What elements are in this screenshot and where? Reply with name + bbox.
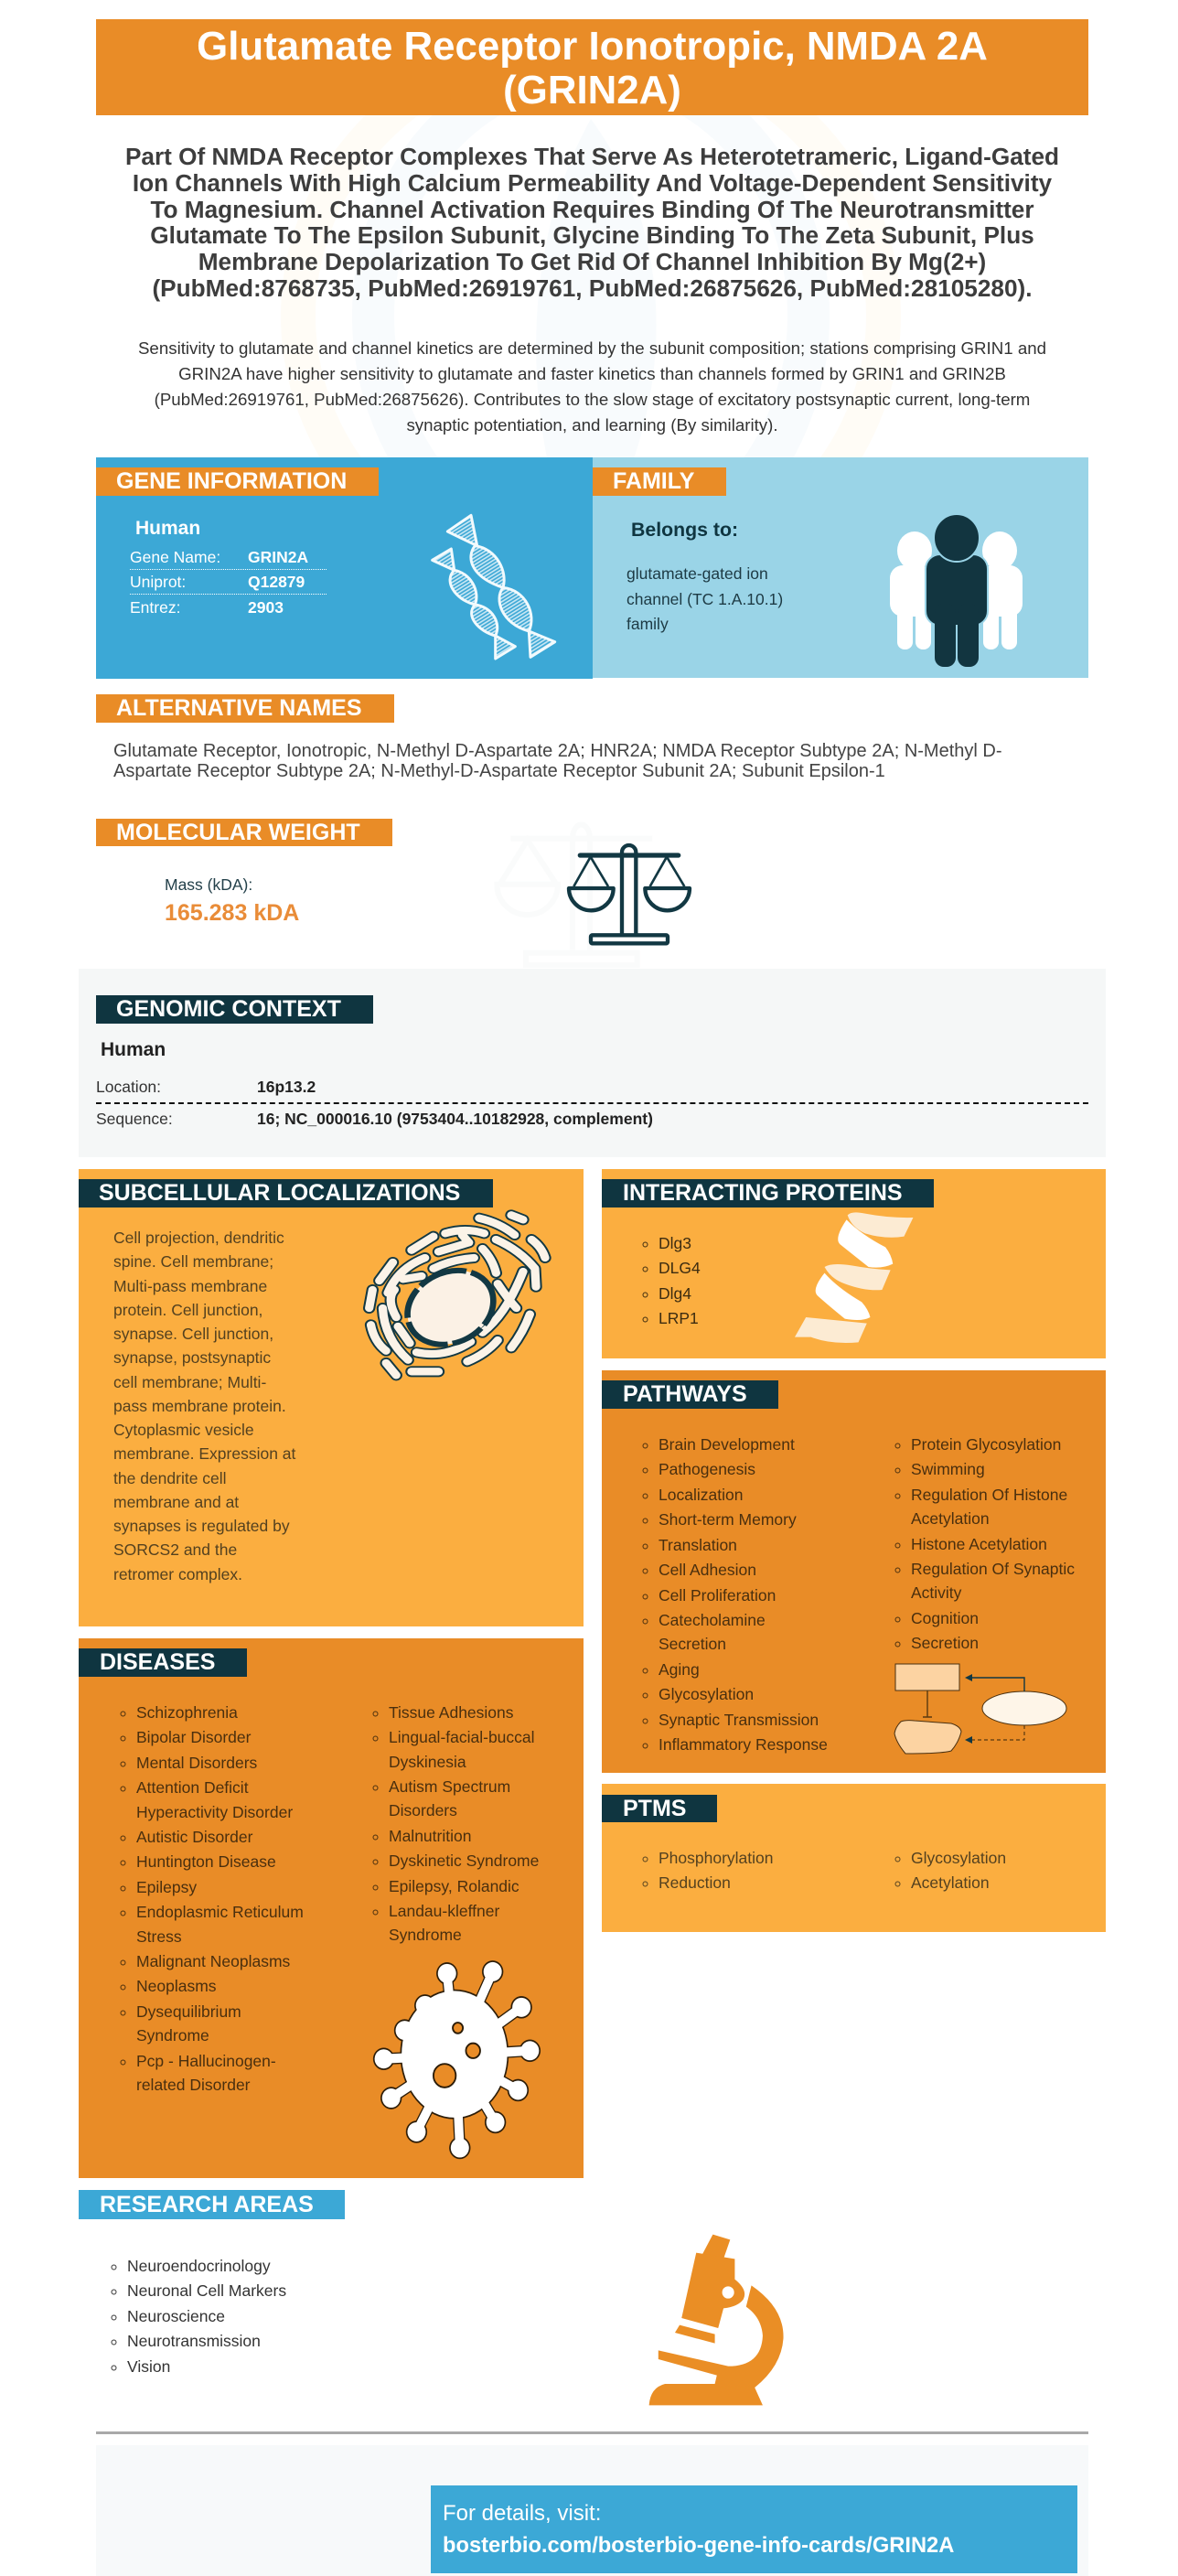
background watermark logo bbox=[281, 115, 901, 457]
diseases list column 1: Epilepsy bbox=[136, 1878, 197, 1896]
localization text: Cell projection, dendritic bbox=[113, 1229, 284, 1247]
belongs to label: Belongs to: bbox=[631, 519, 738, 541]
pathways list column 2: Protein Glycosylation bbox=[911, 1435, 1061, 1454]
localization text: synapse, postsynaptic bbox=[113, 1348, 271, 1367]
localization text: pass membrane protein. bbox=[113, 1397, 286, 1415]
gene name row: Gene Name: bbox=[130, 548, 220, 566]
uniprot row: Uniprot: bbox=[130, 573, 186, 591]
divider line bbox=[96, 2431, 1088, 2434]
location row bbox=[96, 1078, 316, 1096]
diseases list column 2: Malnutrition bbox=[389, 1827, 471, 1845]
pathways list column 2: Secretion bbox=[911, 1634, 979, 1652]
pathways list column 2 bbox=[894, 1435, 1075, 1652]
alternative names text: Glutamate Receptor, Ionotropic, N-Methyl D-Aspartate 2A; HNR2A; NMDA Receptor Subtype 2A; N-Methyl D- bbox=[113, 741, 1001, 761]
title banner: Glutamate Receptor Ionotropic, NMDA 2A bbox=[197, 24, 988, 69]
heading: family bbox=[593, 467, 726, 496]
diseases list column 2 bbox=[373, 1703, 539, 1944]
icon: balance scale with ghost bbox=[567, 843, 691, 946]
panel: genomic context: 16p13.2 bbox=[257, 1078, 316, 1096]
localization text bbox=[113, 1229, 296, 1583]
protein list: LRP1 bbox=[659, 1309, 699, 1327]
panel: genomic context: 16; NC_000016.10 (9753404..10182928, complement) bbox=[257, 1110, 653, 1128]
heading: alternative names: ALTERNATIVE NAMES bbox=[116, 695, 362, 721]
localization text: synapses is regulated by bbox=[113, 1517, 290, 1535]
diseases list column 1: Attention Deficit bbox=[136, 1778, 249, 1797]
heading: diseases: DISEASES bbox=[100, 1649, 215, 1675]
PTMs list column 1: Reduction bbox=[659, 1873, 731, 1892]
protein list bbox=[642, 1234, 701, 1327]
icon: pathway diagram bbox=[894, 1663, 1066, 1755]
panel: gene information bbox=[96, 457, 593, 679]
pathways list column 1: Cell Proliferation bbox=[659, 1586, 776, 1605]
PTMs list column 2 bbox=[894, 1849, 1006, 1892]
panel: genomic context bbox=[79, 969, 1106, 1157]
pathways list column 1: Synaptic Transmission bbox=[659, 1711, 819, 1729]
heading: genomic context: GENOMIC CONTEXT bbox=[116, 996, 341, 1022]
sequence row: Sequence: bbox=[96, 1110, 173, 1128]
heading: diseases bbox=[79, 1648, 247, 1677]
heading: interacting proteins: INTERACTING PROTEINS bbox=[623, 1180, 903, 1206]
PTMs list column 1: Phosphorylation bbox=[659, 1849, 774, 1867]
family description: channel (TC 1.A.10.1) bbox=[626, 589, 783, 607]
diseases list column 2: Landau-kleffner bbox=[389, 1902, 499, 1920]
pathways list column 2: Swimming bbox=[911, 1460, 985, 1478]
pathways list column 1: Aging bbox=[659, 1660, 700, 1679]
diseases list column 1: Endoplasmic Reticulum bbox=[136, 1903, 304, 1921]
diseases list column 1: Bipolar Disorder bbox=[136, 1728, 251, 1746]
research areas list: Vision bbox=[127, 2357, 170, 2376]
localization text: SORCS2 and the bbox=[113, 1540, 237, 1559]
sequence row bbox=[96, 1110, 653, 1128]
icon: microscope bbox=[649, 2234, 784, 2406]
panel: diseases bbox=[79, 1638, 584, 2178]
diseases list column 2: Dyskinetic Syndrome bbox=[389, 1852, 539, 1870]
callout: details link bbox=[431, 2485, 1077, 2573]
localization text: cell membrane; Multi- bbox=[113, 1372, 266, 1390]
heading: pathways bbox=[602, 1380, 778, 1409]
research areas list bbox=[112, 2257, 286, 2376]
family description bbox=[626, 564, 783, 633]
pathways list column 2: Acetylation bbox=[911, 1509, 990, 1528]
pathways list column 1: Brain Development bbox=[659, 1435, 795, 1454]
diseases list column 1: Mental Disorders bbox=[136, 1754, 257, 1772]
panel: footer bbox=[96, 2445, 1088, 2576]
dashed divider bbox=[96, 1102, 1088, 1104]
gene name row bbox=[130, 548, 327, 570]
mass value: 165.283 kDA bbox=[165, 900, 299, 926]
icon: protein ribbon bbox=[795, 1212, 913, 1343]
pathways list column 1: Cell Adhesion bbox=[659, 1561, 756, 1579]
localization text: the dendrite cell bbox=[113, 1469, 227, 1487]
diseases list column 1: Schizophrenia bbox=[136, 1703, 238, 1722]
pathways list column 2: Cognition bbox=[911, 1609, 979, 1627]
species label: Human bbox=[135, 518, 200, 539]
pathways list column 1: Pathogenesis bbox=[659, 1460, 755, 1478]
heading: research areas: RESEARCH AREAS bbox=[100, 2192, 314, 2217]
heading: subcellular localizations: SUBCELLULAR LOCALIZATIONS bbox=[99, 1180, 460, 1206]
PTMs list column 1 bbox=[642, 1849, 774, 1892]
subtitle: function summary: Ion Channels With High Calcium Permeability And Voltage-Dependent Sensitivity bbox=[133, 169, 1052, 197]
localization text: Multi-pass membrane bbox=[113, 1277, 267, 1295]
diseases list column 1: Autistic Disorder bbox=[136, 1828, 252, 1846]
entrez row bbox=[130, 598, 284, 617]
pathways list column 2: Histone Acetylation bbox=[911, 1535, 1047, 1553]
subtitle: function summary: (PubMed:8768735, PubMed:26919761, PubMed:26875626, PubMed:28105280). bbox=[152, 274, 1033, 302]
description paragraph: (PubMed:26919761, PubMed:26875626). Contributes to the slow stage of excitatory postsynaptic current, long-term bbox=[155, 390, 1030, 409]
subtitle: function summary bbox=[125, 143, 1059, 302]
pathways list column 1: Secretion bbox=[659, 1635, 726, 1653]
panel: subcellular localizations bbox=[79, 1169, 584, 1626]
localization text: membrane. Expression at bbox=[113, 1444, 295, 1463]
research areas list: Neuronal Cell Markers bbox=[127, 2281, 286, 2300]
diseases list column 1 bbox=[121, 1703, 304, 2094]
alternative names text bbox=[113, 741, 1001, 781]
diseases list column 1: Dysequilibrium bbox=[136, 2002, 241, 2021]
diseases list column 2: Disorders bbox=[389, 1801, 457, 1819]
diseases list column 1: Malignant Neoplasms bbox=[136, 1952, 290, 1970]
subtitle: function summary: Glutamate To The Epsilon Subunit, Glycine Binding To The Zeta Subunit, Plus bbox=[150, 221, 1034, 249]
entrez row: 2903 bbox=[248, 598, 284, 617]
gene name row: GRIN2A bbox=[248, 548, 308, 566]
diseases list column 1: Syndrome bbox=[136, 2026, 209, 2045]
pathways list column 1 bbox=[642, 1435, 828, 1754]
entrez row: Entrez: bbox=[130, 598, 180, 617]
diseases list column 2: Autism Spectrum bbox=[389, 1777, 510, 1796]
pathways list column 1: Short-term Memory bbox=[659, 1510, 797, 1529]
protein list: Dlg4 bbox=[659, 1284, 691, 1303]
diseases list column 1: Pcp - Hallucinogen- bbox=[136, 2052, 276, 2070]
subtitle: function summary: Membrane Depolarization To Get Rid Of Channel Inhibition By Mg(2+) bbox=[198, 248, 986, 275]
heading: family: FAMILY bbox=[613, 468, 694, 494]
panel: family bbox=[593, 457, 1088, 678]
panel: interacting proteins bbox=[602, 1169, 1106, 1358]
PTMs list column 2: Acetylation bbox=[911, 1873, 990, 1892]
pathways list column 1: Catecholamine bbox=[659, 1611, 766, 1629]
description paragraph: GRIN2A have higher sensitivity to glutamate and faster kinetics than channels formed by GRIN1 and GRIN2B bbox=[178, 364, 1006, 383]
title banner bbox=[96, 19, 1088, 115]
alternative names text: Aspartate Receptor Subtype 2A; N-Methyl-D-Aspartate Receptor Subunit 2A; Subunit Epsilon-1 bbox=[113, 761, 885, 781]
pathways list column 2: Regulation Of Histone bbox=[911, 1486, 1067, 1504]
diseases list column 1: Hyperactivity Disorder bbox=[136, 1803, 293, 1821]
diseases list column 2: Dyskinesia bbox=[389, 1753, 466, 1771]
pathways list column 1: Glycosylation bbox=[659, 1685, 754, 1703]
heading: molecular weight: MOLECULAR WEIGHT bbox=[116, 820, 360, 845]
species label: Human bbox=[101, 1039, 166, 1060]
research areas list: Neuroendocrinology bbox=[127, 2257, 271, 2275]
location row: Location: bbox=[96, 1078, 161, 1096]
family description: glutamate-gated ion bbox=[626, 564, 768, 583]
diseases list column 2: Lingual-facial-buccal bbox=[389, 1728, 535, 1746]
localization text: spine. Cell membrane; bbox=[113, 1252, 273, 1271]
diseases list column 1: Huntington Disease bbox=[136, 1852, 276, 1871]
protein list: Dlg3 bbox=[659, 1234, 691, 1252]
icon: cell with organelles bbox=[363, 1209, 552, 1381]
pathways list column 1: Inflammatory Response bbox=[659, 1735, 828, 1754]
url: bosterbio.com/bosterbio-gene-info-cards/GRIN2A bbox=[443, 2534, 954, 2558]
subtitle: function summary: To Magnesium. Channel Activation Requires Binding Of The Neurotransmitter bbox=[150, 196, 1034, 223]
uniprot row: Q12879 bbox=[248, 573, 305, 591]
localization text: membrane and at bbox=[113, 1493, 239, 1511]
localization text: protein. Cell junction, bbox=[113, 1301, 262, 1319]
diseases list column 1: related Disorder bbox=[136, 2076, 251, 2094]
pathways list column 2: Regulation Of Synaptic bbox=[911, 1560, 1075, 1578]
research areas list: Neurotransmission bbox=[127, 2332, 261, 2350]
icon: virus bbox=[373, 1960, 541, 2159]
visit label: For details, visit: bbox=[443, 2501, 601, 2526]
pathways list column 2: Activity bbox=[911, 1583, 961, 1602]
description paragraph: Sensitivity to glutamate and channel kinetics are determined by the subunit composition; stations comprising GRIN1 and bbox=[138, 338, 1046, 358]
heading: PTMs: PTMS bbox=[623, 1796, 686, 1821]
subtitle: function summary: Part Of NMDA Receptor Complexes That Serve As Heterotetrameric, Ligand-Gated bbox=[125, 143, 1059, 170]
title banner: (GRIN2A) bbox=[503, 68, 681, 113]
diseases list column 2: Syndrome bbox=[389, 1926, 462, 1944]
diseases list column 2: Epilepsy, Rolandic bbox=[389, 1877, 519, 1895]
pathways list column 1: Translation bbox=[659, 1536, 737, 1554]
description paragraph bbox=[138, 338, 1046, 435]
diseases list column 1: Neoplasms bbox=[136, 1977, 217, 1995]
PTMs list column 2: Glycosylation bbox=[911, 1849, 1006, 1867]
pathways list column 1: Localization bbox=[659, 1486, 743, 1504]
protein list: DLG4 bbox=[659, 1259, 701, 1277]
mass label: Mass (kDA): bbox=[165, 875, 252, 894]
localization text: synapse. Cell junction, bbox=[113, 1325, 273, 1343]
diseases list column 1: Stress bbox=[136, 1927, 182, 1946]
localization text: retromer complex. bbox=[113, 1564, 242, 1583]
icon: DNA helices bbox=[431, 514, 556, 660]
heading: gene information: GENE INFORMATION bbox=[116, 468, 347, 494]
family description: family bbox=[626, 615, 669, 633]
panel: pathways bbox=[602, 1370, 1106, 1773]
uniprot row bbox=[130, 573, 327, 595]
heading: pathways: PATHWAYS bbox=[623, 1381, 747, 1407]
description paragraph: synaptic potentiation, and learning (By similarity). bbox=[406, 415, 778, 435]
icon: group of people bbox=[890, 515, 1023, 667]
diseases list column 2: Tissue Adhesions bbox=[389, 1703, 514, 1722]
panel: PTMs bbox=[602, 1784, 1106, 1932]
heading: PTMs bbox=[602, 1795, 717, 1822]
research areas list: Neuroscience bbox=[127, 2307, 225, 2325]
localization text: Cytoplasmic vesicle bbox=[113, 1421, 254, 1439]
